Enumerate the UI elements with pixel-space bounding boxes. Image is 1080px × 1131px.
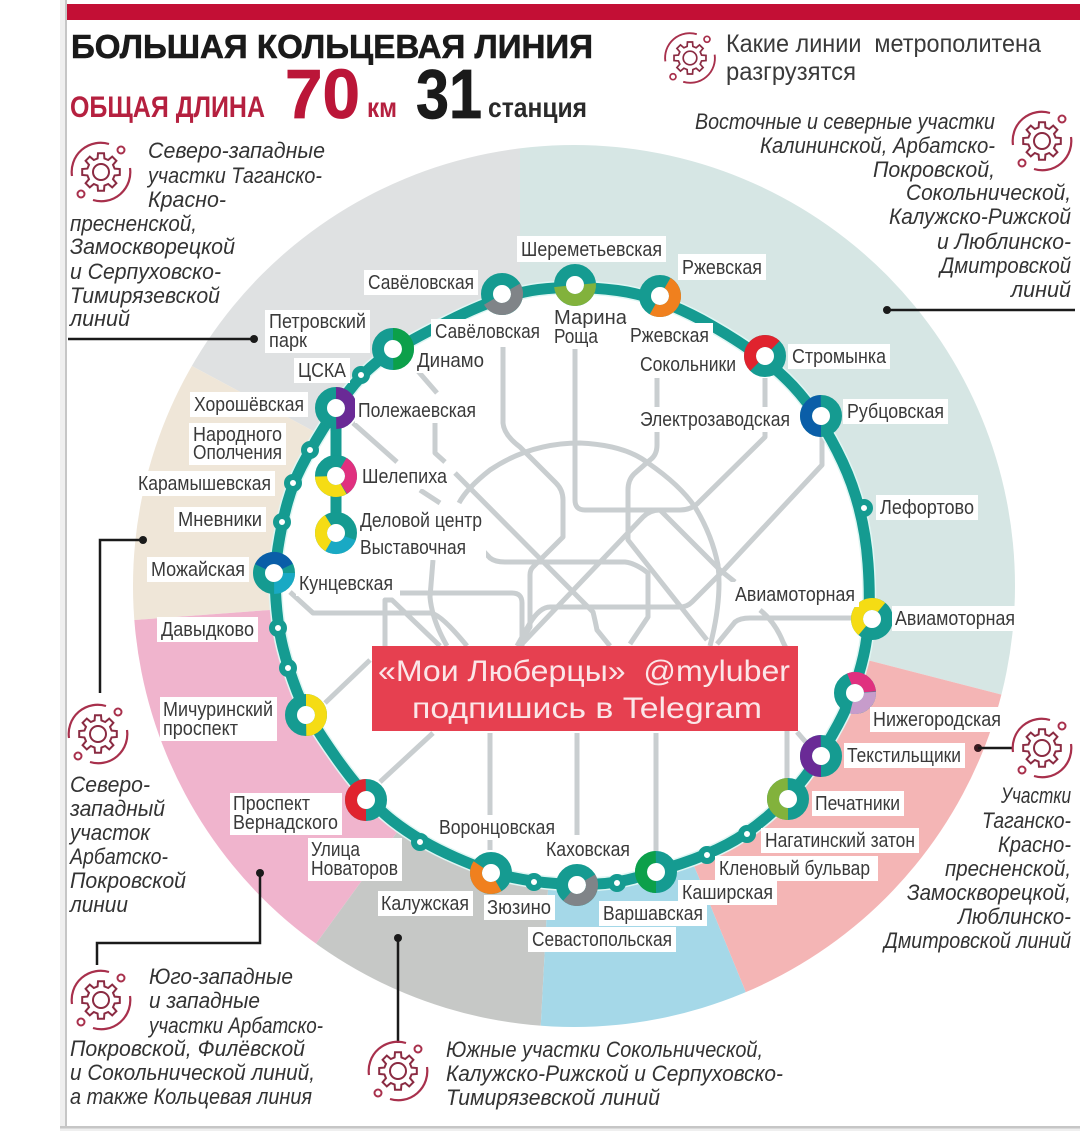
callout: southern sections: Южные участки Сокольнической, xyxy=(446,1037,763,1062)
stats: total length and station count: ОБЩАЯ ДЛИНА xyxy=(70,91,265,124)
station labels: Авиамоторная xyxy=(895,607,1015,630)
station labels xyxy=(134,236,1019,952)
red banner: Telegram xyxy=(372,646,798,731)
callout: north-west sections: Северо-западные xyxy=(148,138,325,163)
station labels: Авиамоторная xyxy=(735,583,855,606)
callout: north and east sections: линий xyxy=(1009,277,1071,302)
grey metro network xyxy=(290,347,860,855)
station labels: парк xyxy=(269,329,308,352)
callout: north and east sections xyxy=(695,109,1075,314)
callout: western section: Арбатско- xyxy=(68,844,168,869)
station labels: Варшавская xyxy=(603,902,703,925)
station labels: Можайская xyxy=(151,558,245,581)
callout: western section: западный xyxy=(69,796,165,821)
sector: south blue xyxy=(540,866,746,1027)
station labels: Роща xyxy=(554,325,598,348)
station labels: Севастопольская xyxy=(532,928,672,951)
station labels: Кунцевская xyxy=(299,572,393,595)
red banner: Telegram: «Мои Люберцы» @myluber xyxy=(378,655,790,688)
interchange stations xyxy=(254,269,893,905)
station labels: Воронцовская xyxy=(439,816,555,839)
station labels: Нижегородская xyxy=(873,708,1001,731)
station labels: Петровский xyxy=(269,310,366,333)
stats: total length and station count: км xyxy=(367,92,397,123)
callout: western section: участок xyxy=(68,820,151,845)
callout: north-west sections: участки Таганско- xyxy=(146,163,322,188)
station labels: Марина xyxy=(554,306,628,329)
station labels: Улица xyxy=(311,838,360,861)
callout: south-eastern sections: Красно- xyxy=(998,832,1071,857)
callout: north and east sections: Сокольнической, xyxy=(906,180,1071,205)
title: БОЛЬШАЯ КОЛЬЦЕВАЯ ЛИНИЯ xyxy=(71,28,593,65)
station labels: Проспект xyxy=(233,792,311,815)
callout: north-west sections: и Серпуховско- xyxy=(70,259,221,284)
station labels: Выставочная xyxy=(360,536,466,559)
sector: north-east teal xyxy=(520,145,1015,694)
callout: north and east sections: и Люблинско- xyxy=(937,229,1071,254)
callout: western section xyxy=(68,536,186,917)
legend header: which lines will be relieved xyxy=(664,30,1041,86)
callout: south-western sections: участки Арбатско- xyxy=(147,1013,323,1038)
station labels: Рубцовская xyxy=(847,400,944,423)
sector: south-west pink xyxy=(134,610,396,944)
callout: north-west sections xyxy=(68,138,325,343)
callout: south-western sections: и Сокольнической линий, xyxy=(70,1060,315,1085)
top red bar xyxy=(67,4,1080,20)
station labels: Лефортово xyxy=(880,496,974,519)
station labels: Стромынка xyxy=(792,345,887,368)
stats: total length and station count: 70 xyxy=(285,55,360,133)
legend header: which lines will be relieved: разгрузятся xyxy=(726,58,856,86)
station labels: Сокольники xyxy=(640,353,736,376)
station labels: Давыдково xyxy=(161,618,254,641)
stats: total length and station count xyxy=(70,55,587,133)
station labels: ЦСКА xyxy=(298,359,346,382)
station labels: Шереметьевская xyxy=(521,238,662,261)
callout: south-western sections: Юго-западные xyxy=(149,964,293,989)
callout: north and east sections: Калужско-Рижской xyxy=(889,204,1071,229)
station labels: Каховская xyxy=(546,838,630,861)
station labels: Текстильщики xyxy=(847,744,961,767)
metro ring line xyxy=(275,287,869,884)
station labels: Мичуринский xyxy=(163,698,273,721)
station labels: Печатники xyxy=(815,792,900,815)
station labels: Ополчения xyxy=(193,441,282,464)
station labels: проспект xyxy=(163,717,239,740)
station labels: Каширская xyxy=(682,881,773,904)
red banner: Telegram: подпишись в Telegram xyxy=(412,692,762,725)
callout: western section: Северо- xyxy=(70,772,150,797)
station labels: Савёловская xyxy=(435,320,540,343)
callout: south-eastern sections: Люблинско- xyxy=(956,904,1071,929)
callout: southern sections xyxy=(368,934,783,1110)
station labels: Народного xyxy=(193,423,282,446)
callout: southern sections: Калужско-Рижской и Серпуховско- xyxy=(446,1061,783,1086)
callout: north-west sections: линий xyxy=(68,306,130,331)
station labels: Электрозаводская xyxy=(640,408,790,431)
station labels: Шелепиха xyxy=(362,465,448,488)
sector: west beige xyxy=(133,366,314,620)
callout: north-west sections: Красно- xyxy=(148,187,226,212)
small stations xyxy=(272,369,870,889)
stats: total length and station count: 31 xyxy=(416,55,482,133)
callout: south-western sections: а также Кольцевая линия xyxy=(70,1084,312,1109)
sector: south grey xyxy=(316,832,548,1026)
callout: southern sections: Тимирязевской линий xyxy=(446,1085,660,1110)
station labels: Зюзино xyxy=(487,896,551,919)
station labels: Вернадского xyxy=(233,811,338,834)
callout: north-west sections: Замоскворецкой xyxy=(70,234,235,259)
callout: north-west sections: пресненской, xyxy=(70,211,197,236)
callout: north and east sections: Калининской, Арбатско- xyxy=(760,133,995,158)
station labels: Ржевская xyxy=(682,256,762,279)
legend header: which lines will be relieved: Какие линии метрополитена xyxy=(726,30,1041,58)
station labels: Нагатинский затон xyxy=(765,829,915,852)
circular sector diagram xyxy=(133,145,1015,1027)
callout: north and east sections: Покровской, xyxy=(873,157,995,182)
sector: south-east salmon xyxy=(694,660,1002,992)
callout: south-eastern sections: пресненской, xyxy=(945,856,1071,881)
callout: western section: линии xyxy=(68,892,128,917)
station labels: Кленовый бульвар xyxy=(719,857,870,880)
callout: north and east sections: Восточные и северные участки xyxy=(695,109,995,134)
callout: south-western sections: и западные xyxy=(149,988,260,1013)
station labels: Деловой центр xyxy=(360,509,482,532)
callout: western section: Покровской xyxy=(70,868,186,893)
metro ring interior xyxy=(275,287,869,884)
station labels: Ржевская xyxy=(630,324,709,347)
sector: north-west grey xyxy=(192,148,520,431)
callout: south-western sections xyxy=(70,869,323,1109)
station labels: Новаторов xyxy=(311,857,398,880)
stats: total length and station count: станция xyxy=(488,92,587,123)
station labels: Мневники xyxy=(178,508,262,531)
station labels: Савёловская xyxy=(368,271,474,294)
station labels: Полежаевская xyxy=(358,399,476,422)
station labels: Калужская xyxy=(381,892,469,915)
station labels: Карамышевская xyxy=(138,472,271,495)
callout: south-western sections: Покровской, Филёвской xyxy=(70,1036,305,1061)
callout: south-eastern sections xyxy=(881,718,1072,953)
station labels: Динамо xyxy=(417,349,484,372)
callout: north-west sections: Тимирязевской xyxy=(70,283,220,308)
station labels: Хорошёвская xyxy=(194,393,304,416)
